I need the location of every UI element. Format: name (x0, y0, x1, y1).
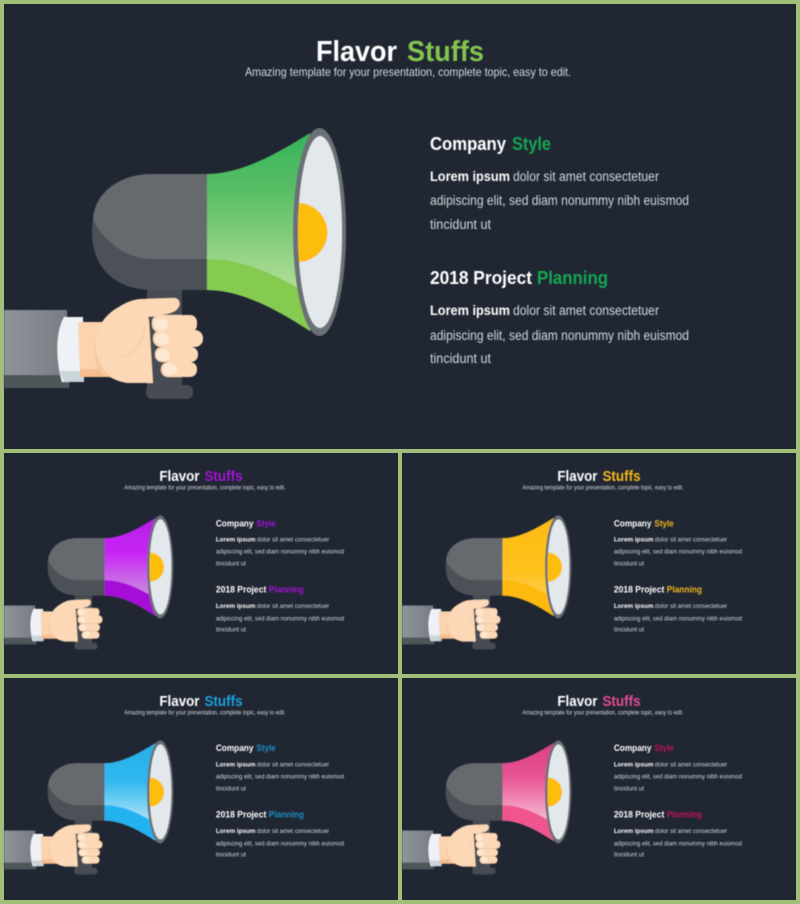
text block: 2018 Project Planning: dolor sit amet consectetuer (655, 603, 728, 610)
text block: 2018 Project Planning: dolor sit amet consectetuer (257, 603, 330, 610)
panel: purple slide (4, 453, 398, 674)
title: Stuffs (407, 36, 484, 68)
text block: 2018 Project Planning: Planning (269, 810, 304, 820)
title: Stuffs (204, 469, 243, 485)
text block: 2018 Project Planning: Planning (269, 585, 304, 595)
text block: 2018 Project Planning: 2018 Project (614, 585, 664, 595)
text block: 2018 Project Planning (216, 585, 344, 634)
megaphone horn (104, 743, 155, 841)
text block: Company Style: tincidunt ut (216, 785, 246, 792)
text block: Company Style: Company (614, 743, 651, 753)
horn lower band (207, 259, 310, 331)
text block: 2018 Project Planning: Lorem ipsum (216, 603, 255, 610)
text block: Company Style: dolor sit amet consectetuer (513, 169, 659, 184)
slide content (402, 469, 742, 650)
text block: Company Style: Company (216, 743, 253, 753)
megaphone illustration: green (4, 128, 346, 399)
text block: 2018 Project Planning: Lorem ipsum (430, 303, 510, 318)
text block: 2018 Project Planning: Lorem ipsum (216, 828, 255, 835)
panel background (4, 4, 796, 449)
text block: Company Style: dolor sit amet consectetuer (655, 537, 728, 544)
text block: 2018 Project Planning: Planning (667, 810, 702, 820)
text block: 2018 Project Planning: adipiscing elit, sed diam nonummy nibh euismod (216, 615, 344, 622)
text block: Company Style: adipiscing elit, sed diam nonummy nibh euismod (614, 548, 742, 555)
megaphone horn (502, 743, 553, 841)
text block: Company Style: dolor sit amet consectetuer (257, 762, 330, 769)
text block: Company Style: Lorem ipsum (430, 169, 510, 184)
title: Flavor (159, 469, 200, 485)
title (159, 469, 243, 485)
text block: Company Style (430, 134, 689, 232)
title: Flavor (316, 36, 397, 68)
text block: Company Style: tincidunt ut (216, 560, 246, 567)
text block: Company Style: adipiscing elit, sed diam nonummy nibh euismod (430, 193, 689, 208)
horn lower band (104, 580, 155, 616)
text block: Company Style: Style (256, 518, 276, 528)
text block: 2018 Project Planning: tincidunt ut (216, 852, 246, 859)
horn lower band (502, 805, 553, 841)
text block: 2018 Project Planning: 2018 Project (430, 268, 532, 288)
text block: 2018 Project Planning: dolor sit amet consectetuer (513, 303, 659, 318)
title: Stuffs (204, 694, 243, 710)
text block: Company Style: Company (430, 134, 506, 154)
horn lower band (104, 805, 155, 841)
text block: 2018 Project Planning: tincidunt ut (614, 627, 644, 634)
text block: 2018 Project Planning: adipiscing elit, sed diam nonummy nibh euismod (614, 615, 742, 622)
text block: 2018 Project Planning (430, 268, 689, 366)
text block: 2018 Project Planning (216, 810, 344, 859)
title: Flavor (557, 694, 598, 710)
megaphone illustration: pink (402, 740, 571, 875)
text block: Company Style (216, 743, 344, 792)
panel: blue slide (4, 678, 398, 900)
slide content (4, 469, 344, 650)
panel background (402, 678, 796, 900)
text block: 2018 Project Planning (614, 810, 742, 859)
text block: Company Style: Lorem ipsum (216, 537, 255, 544)
title: Flavor (159, 694, 200, 710)
panel background (4, 678, 398, 900)
subtitle: Amazing template for your presentation, complete topic, easy to edit. (124, 486, 286, 492)
text block: Company Style: Company (216, 518, 253, 528)
megaphone horn (502, 518, 553, 616)
slide content (402, 694, 742, 875)
text block: 2018 Project Planning: 2018 Project (216, 585, 266, 595)
text block: Company Style: Style (654, 518, 674, 528)
text block: Company Style: tincidunt ut (614, 560, 644, 567)
subtitle: Amazing template for your presentation, complete topic, easy to edit. (522, 486, 684, 492)
title (159, 694, 243, 710)
text block: Company Style: adipiscing elit, sed diam nonummy nibh euismod (216, 548, 344, 555)
panel background (4, 453, 398, 674)
text block: Company Style: tincidunt ut (614, 785, 644, 792)
megaphone horn (207, 133, 310, 331)
text block: Company Style (614, 518, 742, 567)
text block: 2018 Project Planning: Planning (667, 585, 702, 595)
title (316, 36, 484, 68)
title: Stuffs (602, 694, 641, 710)
panel: yellow slide (402, 453, 796, 674)
text block: 2018 Project Planning: tincidunt ut (216, 627, 246, 634)
text block: 2018 Project Planning: dolor sit amet consectetuer (257, 828, 330, 835)
text block: Company Style: tincidunt ut (430, 217, 491, 232)
panel background (402, 453, 796, 674)
megaphone horn (104, 518, 155, 616)
text block: 2018 Project Planning: adipiscing elit, sed diam nonummy nibh euismod (430, 328, 689, 343)
text block: 2018 Project Planning: Lorem ipsum (614, 828, 653, 835)
text block: Company Style: Style (256, 743, 276, 753)
text block: Company Style: Lorem ipsum (614, 537, 653, 544)
panel: main green slide (4, 4, 796, 449)
text block: Company Style: adipiscing elit, sed diam nonummy nibh euismod (216, 773, 344, 780)
title: Flavor (557, 469, 598, 485)
text block: 2018 Project Planning: Planning (537, 268, 608, 288)
text block: Company Style (614, 743, 742, 792)
text block: 2018 Project Planning: Lorem ipsum (614, 603, 653, 610)
panel: pink slide (402, 678, 796, 900)
text block: 2018 Project Planning: tincidunt ut (430, 351, 491, 366)
subtitle: Amazing template for your presentation, complete topic, easy to edit. (245, 65, 571, 79)
text block: Company Style: Style (654, 743, 674, 753)
text block: Company Style (216, 518, 344, 567)
title (557, 694, 641, 710)
title: Stuffs (602, 469, 641, 485)
horn lower band (502, 580, 553, 616)
text block: 2018 Project Planning: dolor sit amet consectetuer (655, 828, 728, 835)
text block: 2018 Project Planning: adipiscing elit, sed diam nonummy nibh euismod (614, 840, 742, 847)
megaphone illustration: blue (4, 740, 173, 875)
text block: Company Style: Lorem ipsum (614, 762, 653, 769)
text block: 2018 Project Planning: 2018 Project (216, 810, 266, 820)
slide content (4, 694, 344, 875)
text block: 2018 Project Planning: tincidunt ut (614, 852, 644, 859)
subtitle: Amazing template for your presentation, complete topic, easy to edit. (522, 711, 684, 717)
text block: 2018 Project Planning: adipiscing elit, sed diam nonummy nibh euismod (216, 840, 344, 847)
text block: Company Style: dolor sit amet consectetuer (655, 762, 728, 769)
text block: Company Style: adipiscing elit, sed diam nonummy nibh euismod (614, 773, 742, 780)
text block: Company Style: dolor sit amet consectetuer (257, 537, 330, 544)
text block: 2018 Project Planning (614, 585, 742, 634)
megaphone illustration: purple (4, 515, 173, 650)
text block: Company Style: Lorem ipsum (216, 762, 255, 769)
text block: Company Style: Company (614, 518, 651, 528)
text block: Company Style: Style (512, 134, 551, 154)
title (557, 469, 641, 485)
text block: 2018 Project Planning: 2018 Project (614, 810, 664, 820)
megaphone illustration: yellow (402, 515, 571, 650)
subtitle: Amazing template for your presentation, complete topic, easy to edit. (124, 711, 286, 717)
